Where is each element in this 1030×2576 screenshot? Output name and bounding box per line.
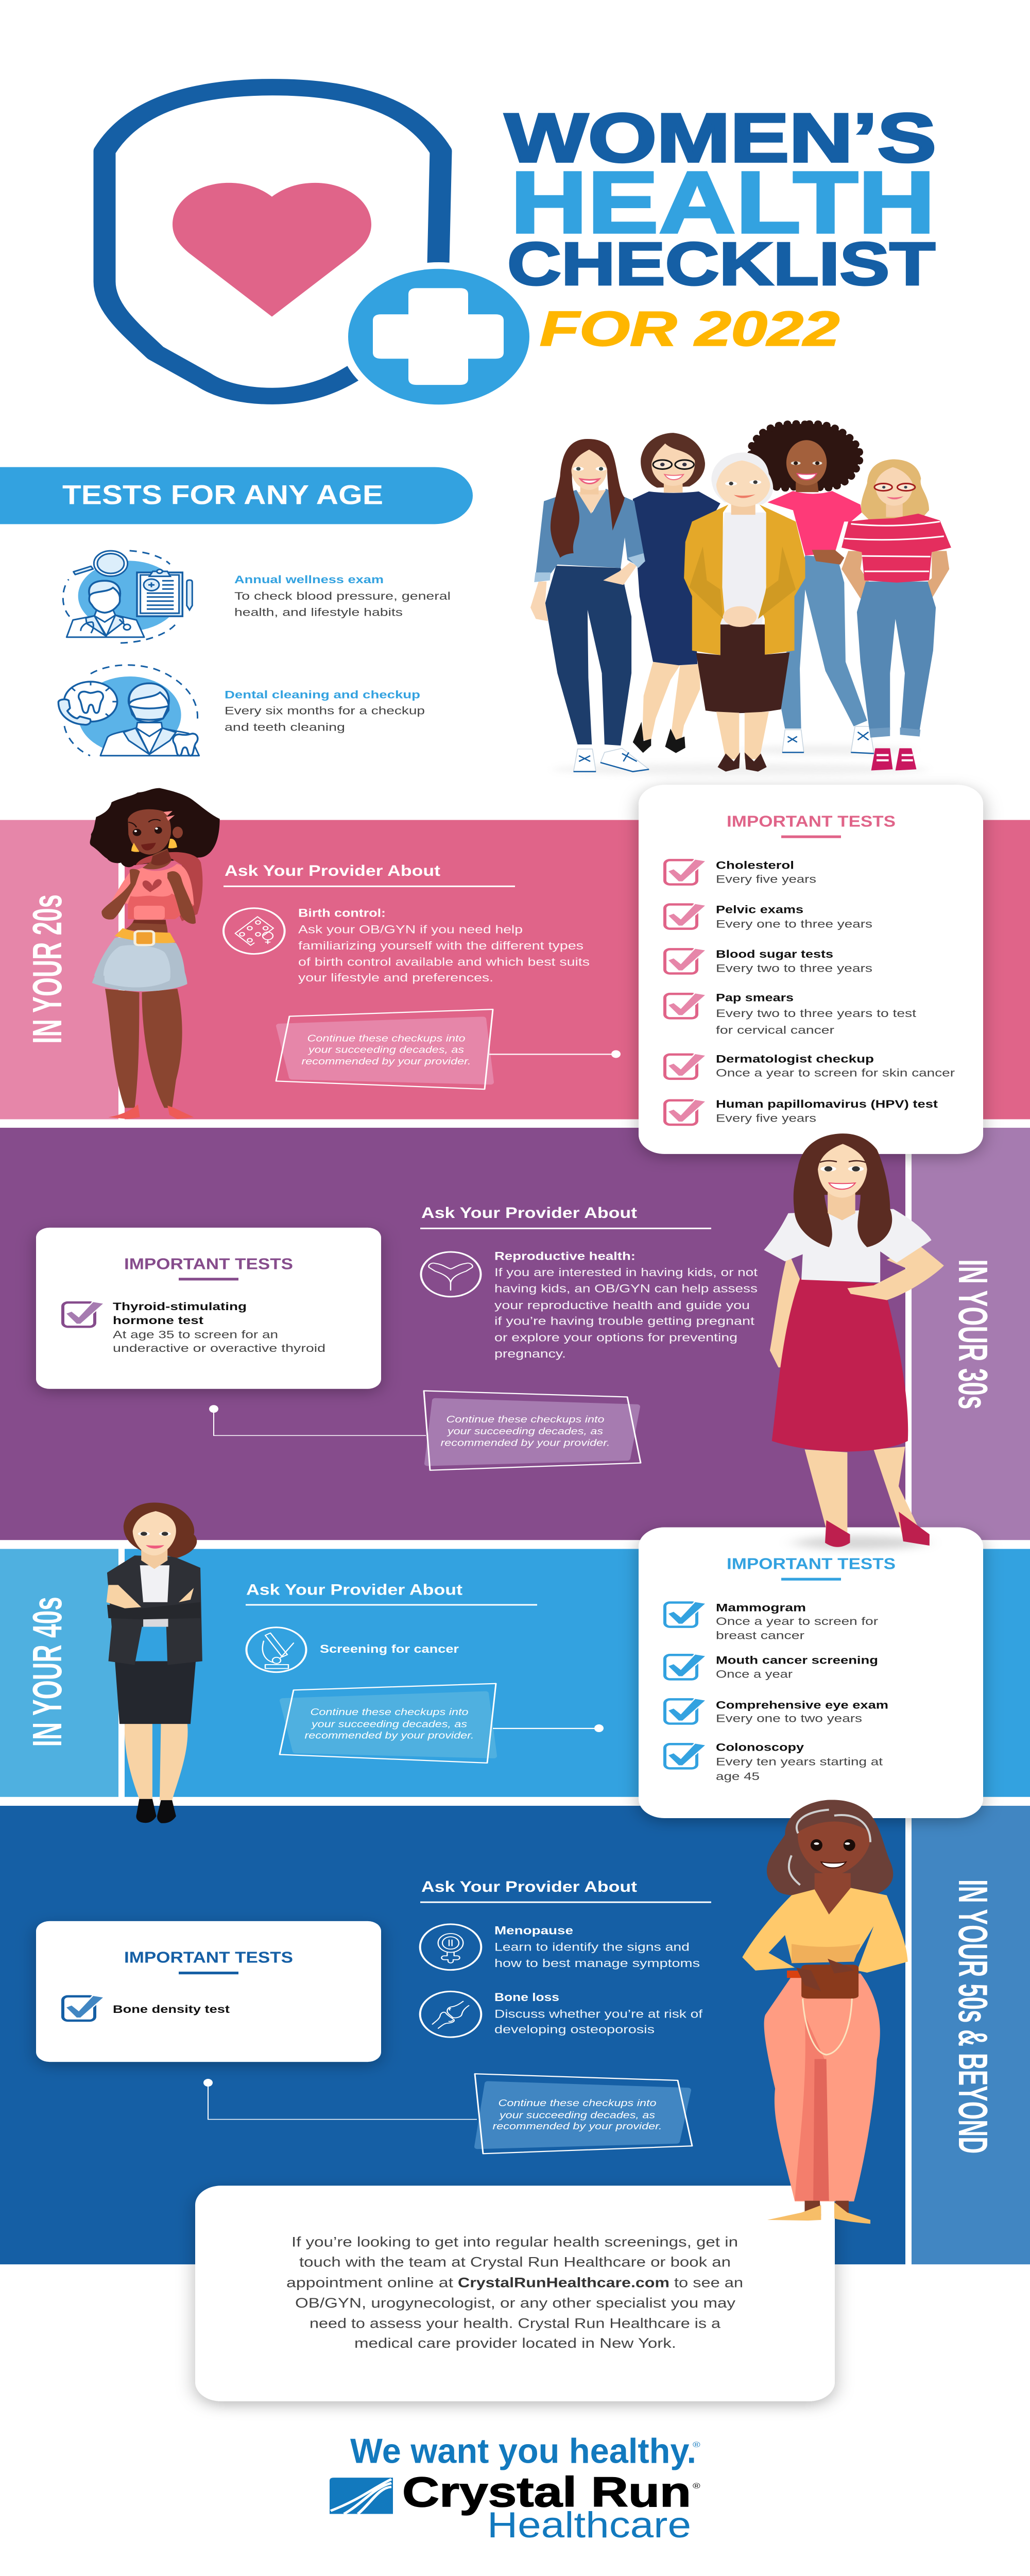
callout: continue checkups: recommended by your provider. — [493, 2121, 662, 2131]
side label: in your 50s and beyond: IN YOUR 50s & BEYOND — [950, 1879, 996, 2154]
text: reproductive health: your reproductive health and guide you — [494, 1298, 750, 1312]
icon: logo mark — [330, 2478, 393, 2514]
text: bone loss — [494, 1990, 703, 2036]
checklist item: pelvic exams — [665, 904, 872, 930]
text: bone loss: Bone loss — [494, 1990, 559, 2004]
checklist item: comprehensive eye exam — [665, 1699, 888, 1725]
checklist item: cholesterol: Every five years — [716, 873, 816, 886]
text: reproductive health: If you are interested in having kids, or not — [494, 1266, 758, 1279]
illustration: woman in her 30s — [764, 1133, 944, 1550]
panel: in your 50s and beyond — [0, 1806, 1030, 2401]
closing text card: CrystalRunHealthcare.com — [458, 2275, 670, 2290]
side label: in your 40s: IN YOUR 40s — [24, 1597, 70, 1747]
text: reproductive health: or explore your options for preventing — [494, 1331, 737, 1344]
text: menopause: how to best manage symptoms — [494, 1957, 700, 1970]
title: for 2022: FOR 2022 — [540, 301, 839, 356]
icon: heart — [173, 183, 371, 317]
text: reproductive health — [494, 1249, 758, 1360]
side label: in your 30s: IN YOUR 30s — [950, 1259, 996, 1409]
checklist item: pelvic exams: Every one to three years — [716, 918, 872, 930]
connector line — [493, 1724, 604, 1732]
icon: birth control pills — [224, 908, 285, 954]
band background — [0, 1806, 1030, 2264]
panel: tests for any age — [0, 424, 951, 775]
illustration: woman in her 20s — [90, 788, 220, 1119]
checklist item: hpv test: Every five years — [716, 1112, 816, 1125]
checklist item: pap smears: Every two to three years to test — [716, 1007, 916, 1020]
panel: in your 40s — [0, 1528, 1030, 1818]
checklist item: blood sugar tests — [665, 948, 872, 975]
checklist item: mouth cancer screening: Mouth cancer screening — [716, 1654, 878, 1667]
banner heading: TESTS FOR ANY AGE — [62, 480, 383, 510]
text: menopause: Menopause — [494, 1924, 573, 1937]
checklist item: comprehensive eye exam: Every one to two years — [716, 1713, 862, 1725]
text: birth control: of birth control available and which best suits — [298, 955, 590, 969]
checklist item: hpv test — [665, 1098, 938, 1125]
icon: medical cross badge — [339, 262, 538, 411]
text: dental cleaning and checkup: Dental cleaning and checkup — [225, 689, 420, 701]
card: important tests: Thyroid-stimulating — [113, 1300, 247, 1313]
card: important tests: IMPORTANT TESTS — [124, 1255, 293, 1273]
heading: ask your provider about: Ask Your Provider About — [225, 862, 440, 879]
icon: dentist with tooth — [58, 665, 199, 756]
card: important tests — [36, 1228, 381, 1389]
card: important tests: Bone density test — [113, 2003, 230, 2015]
text: birth control: familiarizing yourself with the different types — [298, 939, 583, 952]
checklist item: colonoscopy — [665, 1741, 883, 1783]
panel: in your 30s — [0, 1128, 1030, 1540]
text: birth control: Ask your OB/GYN if you need help — [298, 923, 523, 936]
checklist item: blood sugar tests: Blood sugar tests — [716, 948, 833, 960]
closing text card: touch with the team at Crystal Run Healthcare or book an — [299, 2254, 731, 2270]
text: dental cleaning and checkup: and teeth cleaning — [225, 721, 345, 734]
callout: continue checkups: Continue these checkups into — [307, 1032, 465, 1043]
text: birth control: your lifestyle and preferences. — [298, 971, 493, 984]
checklist item: mammogram: Once a year to screen for — [716, 1615, 879, 1628]
callout: continue checkups: recommended by your provider. — [305, 1730, 474, 1741]
title: health: HEALTH — [510, 154, 935, 251]
icon: microscope — [246, 1628, 306, 1672]
callout: continue checkups: your succeeding decades, as — [499, 2109, 655, 2121]
checklist item: mouth cancer screening: Once a year — [716, 1668, 793, 1681]
text: screening for cancer: Screening for cancer — [320, 1642, 459, 1655]
icon: shield outline — [105, 87, 441, 396]
connector line — [203, 2079, 477, 2120]
checklist item: pelvic exams: Pelvic exams — [716, 904, 803, 916]
band background — [0, 1549, 1030, 1797]
card: important tests: IMPORTANT TESTS — [727, 812, 896, 830]
checklist item: colonoscopy: Colonoscopy — [716, 1741, 804, 1754]
icon: venus symbol — [420, 1924, 481, 1970]
checklist item: dermatologist checkup: Dermatologist checkup — [716, 1053, 874, 1065]
card: important tests — [639, 1528, 983, 1818]
tagline: We want you healthy. — [350, 2432, 696, 2470]
text: reproductive health: if you’re having trouble getting pregnant — [494, 1314, 755, 1328]
text: menopause: Learn to identify the signs and — [494, 1940, 690, 1954]
checklist item: colonoscopy: Every ten years starting at — [716, 1756, 883, 1768]
closing text card: to see an — [674, 2275, 743, 2290]
text: birth control: Birth control: — [298, 906, 386, 920]
checklist item: pap smears: Pap smears — [716, 992, 794, 1004]
text: reproductive health: Reproductive health: — [494, 1249, 636, 1263]
closing text card — [195, 2185, 835, 2401]
closing text card: need to assess your health. Crystal Run Healthcare is a — [310, 2315, 720, 2331]
checklist item: mammogram: breast cancer — [716, 1630, 805, 1642]
text: annual wellness exam: Annual wellness exam — [234, 574, 384, 586]
title: checklist: CHECKLIST — [507, 230, 935, 298]
callout: continue checkups: your succeeding decades, as — [447, 1426, 603, 1436]
checklist item: hpv test: Human papillomavirus (HPV) test — [716, 1098, 938, 1110]
wordmark: crystal run: ® — [693, 2482, 700, 2490]
checklist item: comprehensive eye exam: Comprehensive eye exam — [716, 1699, 888, 1711]
text: menopause — [494, 1924, 700, 1970]
text: annual wellness exam: To check blood pressure, general — [234, 590, 451, 602]
closing text card: appointment online at — [286, 2275, 453, 2290]
text: bone loss: Discuss whether you’re at risk of — [494, 2007, 703, 2021]
callout: continue checkups — [276, 1009, 493, 1089]
checklist item: colonoscopy: age 45 — [716, 1770, 760, 1783]
callout: continue checkups: Continue these checkups into — [446, 1414, 604, 1425]
text: dental cleaning and checkup: Every six months for a checkup — [225, 705, 425, 717]
icon: bone joint — [420, 1991, 481, 2037]
callout: continue checkups: recommended by your provider. — [301, 1056, 471, 1066]
card: important tests: underactive or overactive thyroid — [113, 1342, 325, 1354]
closing text card: OB/GYN, urogynecologist, or any other specialist you may — [295, 2295, 735, 2311]
illustration: woman in her 50s — [742, 1800, 908, 2224]
checklist item: pap smears — [665, 992, 916, 1036]
card: important tests: hormone test — [113, 1314, 204, 1327]
connector line — [489, 1050, 621, 1058]
text: dental cleaning and checkup — [225, 689, 425, 734]
callout: continue checkups: recommended by your provider. — [440, 1437, 610, 1448]
checklist item: dermatologist checkup: Once a year to screen for skin cancer — [716, 1067, 955, 1079]
header: logo and title — [105, 87, 936, 411]
title: women's: WOMEN’S — [505, 99, 936, 176]
connector line — [209, 1405, 426, 1435]
callout: continue checkups — [475, 2074, 692, 2154]
wordmark: crystal run: Crystal Run — [402, 2469, 691, 2516]
checklist item: mouth cancer screening — [665, 1654, 878, 1681]
band background — [0, 820, 1030, 1119]
card: important tests — [639, 785, 983, 1154]
card: important tests: IMPORTANT TESTS — [727, 1554, 896, 1572]
callout: continue checkups: Continue these checkups into — [499, 2097, 656, 2108]
callout: continue checkups — [424, 1391, 641, 1470]
icon: uterus — [421, 1252, 481, 1297]
checklist item: cholesterol: Cholesterol — [716, 859, 794, 872]
icon: doctor with clipboard — [63, 551, 192, 643]
wordmark: healthcare: Healthcare — [487, 2505, 691, 2545]
checklist item: blood sugar tests: Every two to three years — [716, 962, 872, 975]
closing text card: medical care provider located in New York. — [354, 2335, 676, 2351]
heading: ask your provider about: Ask Your Provider About — [246, 1581, 462, 1598]
heading: ask your provider about: Ask Your Provider About — [421, 1878, 637, 1895]
text: birth control — [298, 906, 590, 984]
text: bone loss: developing osteoporosis — [494, 2023, 655, 2036]
checklist item: cholesterol — [665, 859, 816, 886]
text: annual wellness exam: health, and lifestyle habits — [234, 606, 403, 619]
checklist item: pap smears: for cervical cancer — [716, 1024, 835, 1036]
checklist item: dermatologist checkup — [665, 1053, 955, 1079]
tagline: ® — [693, 2440, 700, 2449]
text: reproductive health: having kids, an OB/GYN can help assess — [494, 1282, 758, 1295]
card: important tests — [36, 1921, 381, 2062]
side label: in your 20s: IN YOUR 20s — [24, 894, 70, 1044]
text: reproductive health: pregnancy. — [494, 1347, 566, 1360]
text: annual wellness exam — [234, 574, 451, 619]
callout: continue checkups: Continue these checkups into — [311, 1706, 469, 1717]
panel: in your 20s — [0, 785, 1030, 1154]
card: important tests: IMPORTANT TESTS — [124, 1948, 293, 1966]
card: important tests: At age 35 to screen for an — [113, 1329, 278, 1341]
checklist item: mammogram — [665, 1602, 879, 1642]
heading: ask your provider about: Ask Your Provider About — [421, 1205, 637, 1222]
callout: continue checkups: your succeeding decades, as — [311, 1718, 467, 1730]
band background — [0, 1128, 1030, 1540]
illustration: woman in her 40s — [107, 1502, 202, 1823]
callout: continue checkups: your succeeding decades, as — [307, 1044, 464, 1055]
checklist item: mammogram: Mammogram — [716, 1602, 806, 1614]
banner heading — [0, 467, 473, 524]
closing text card: If you’re looking to get into regular health screenings, get in — [291, 2234, 738, 2250]
logo: crystal run healthcare — [330, 2432, 700, 2545]
illustration: group of five women — [530, 424, 951, 775]
callout: continue checkups — [280, 1684, 496, 1763]
